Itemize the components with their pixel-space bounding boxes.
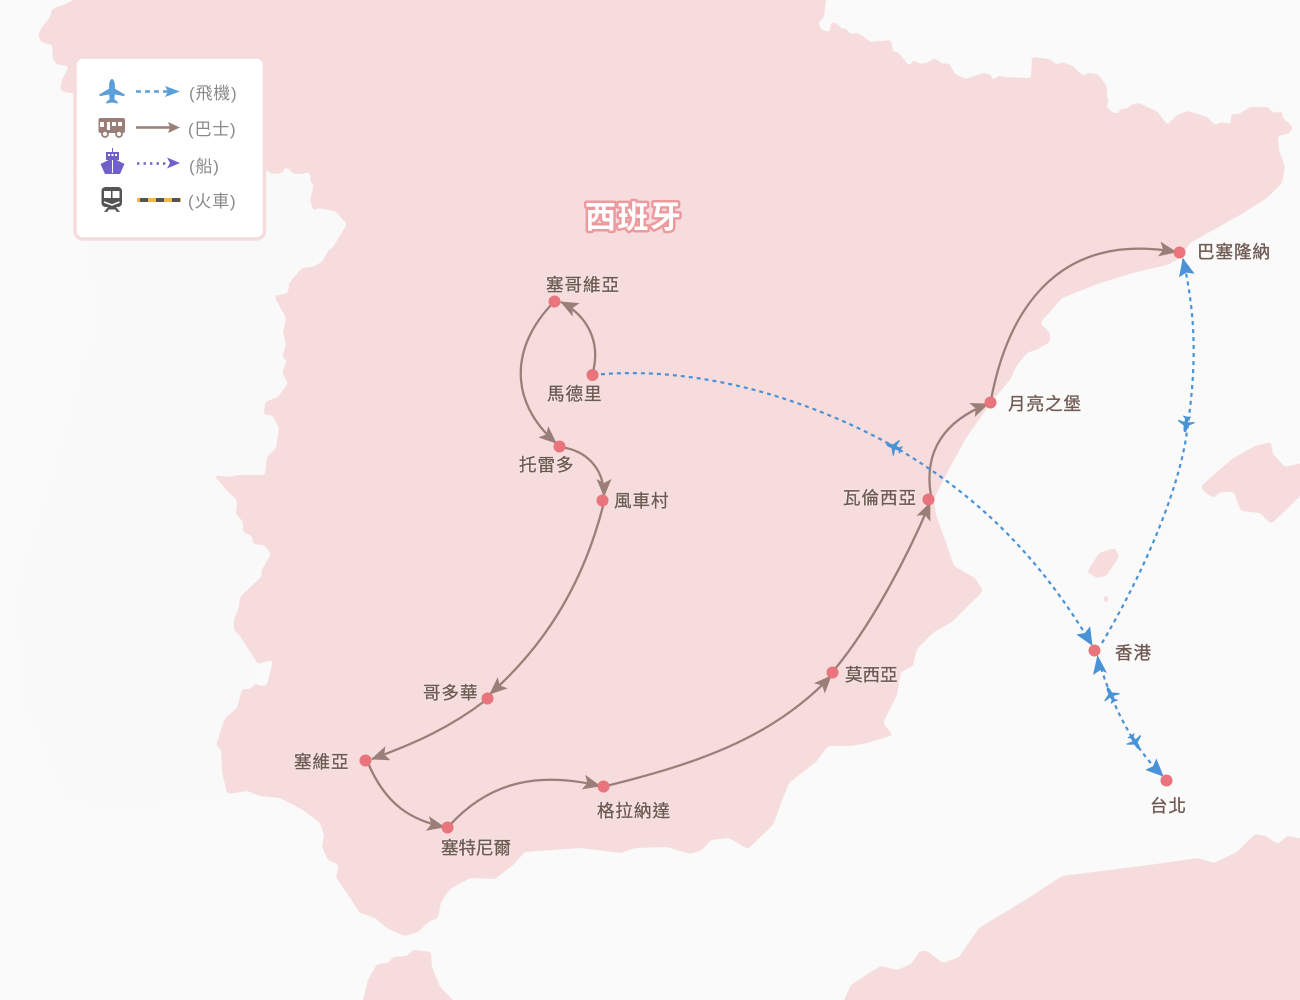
flight: Hong Kong to Barcelona (1102, 259, 1194, 643)
icon: legend ship (100, 148, 124, 174)
bus route: Segovia to Toledo (521, 303, 556, 443)
icon: plane heading to Hong Kong (1100, 684, 1122, 706)
icon: legend plane (100, 79, 124, 104)
label: bus: (巴士) (188, 120, 237, 139)
land: Formentera (1104, 596, 1108, 602)
land: North Africa east (844, 834, 1300, 1000)
city labels: 香港 (1115, 643, 1152, 663)
bus route: Seville to Setenil (368, 763, 444, 827)
city labels: 瓦倫西亞 (843, 488, 917, 508)
bus route: Peniscola to Barcelona (991, 249, 1176, 400)
city markers (360, 246, 1186, 834)
arrow: train line (137, 198, 181, 202)
panel: legend (75, 57, 264, 239)
flight: Hong Kong to Taipei (1101, 668, 1163, 776)
title: 西班牙 (585, 200, 682, 235)
label: train: (火車) (188, 192, 237, 211)
land: North Africa west (363, 950, 460, 1000)
city labels: 格拉納達 (597, 801, 671, 821)
city labels: 托雷多 (519, 455, 574, 475)
icon: plane near Balearic sea (1177, 415, 1195, 433)
flight: Madrid to Hong Kong (593, 373, 1092, 645)
arrow: ship dotted (137, 158, 180, 168)
city labels: 風車村 (614, 491, 670, 511)
icon: legend bus (98, 118, 125, 137)
city labels: 塞特尼爾 (441, 838, 511, 858)
bus route: Setenil to Granada (450, 780, 600, 825)
label: ship: (船) (189, 157, 220, 176)
city labels: 台北 (1150, 796, 1187, 816)
bus route: Murcia to Valencia (835, 503, 930, 669)
routes: bus (368, 249, 1176, 827)
label: plane: (飛機) (189, 84, 238, 103)
city labels: 塞維亞 (294, 752, 350, 772)
city labels: 塞哥維亞 (546, 275, 620, 295)
city labels: 巴塞隆納 (1197, 242, 1271, 262)
land: Ibiza (1087, 548, 1119, 578)
bus route: Granada to Murcia (606, 676, 831, 786)
land: Portugal (20, 170, 347, 805)
land: Mallorca (1201, 442, 1300, 524)
city labels: 哥多華 (423, 683, 478, 703)
routes: flights (593, 259, 1195, 776)
legend box (75, 57, 264, 239)
arrow: flight dashed (136, 86, 180, 97)
city labels: 莫西亞 (845, 665, 898, 685)
bus route: Valencia to Peniscola (929, 404, 988, 496)
bus route: Toledo to windmill village (560, 447, 604, 496)
bus route: Madrid to Segovia (561, 302, 595, 372)
icon: plane over Valencia coast (883, 436, 905, 458)
city labels: 月亮之堡 (1008, 394, 1082, 414)
arrow: bus solid (136, 122, 180, 133)
icon: plane heading to Taipei (1124, 731, 1146, 753)
icon: legend train (102, 187, 122, 212)
bus route: windmill village to Cordoba (490, 502, 604, 694)
bus route: Cordoba to Seville (372, 700, 486, 759)
flight arrowhead: into Hong Kong from Taipei (1093, 655, 1107, 675)
city labels: 馬德里 (547, 384, 602, 404)
